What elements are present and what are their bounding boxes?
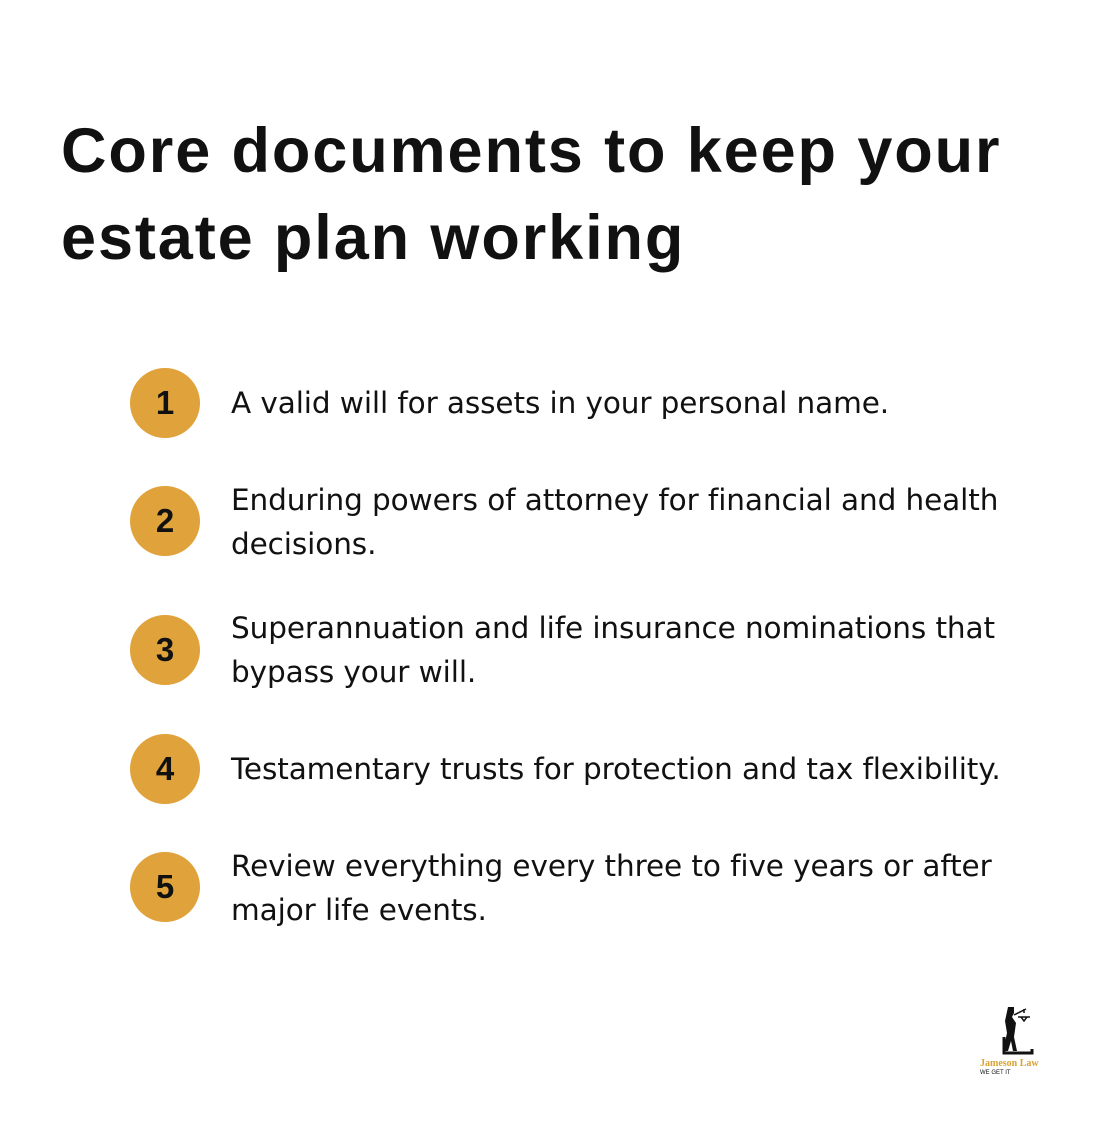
number badge 5 [130,852,200,922]
text 5: Review everything every three to five years or after [231,849,992,883]
logo: Jameson Law [980,1007,1039,1076]
text 4: Testamentary trusts for protection and tax flexibility. [231,752,1001,786]
text 1: A valid will for assets in your personal name. [231,386,889,420]
number badge 4 [130,734,200,804]
text 3 [231,611,995,689]
text 3: Superannuation and life insurance nominations that [231,611,995,645]
number badge 3: 3 [156,631,174,668]
number badge 1 [130,368,200,438]
number badge 2 [130,486,200,556]
number badge 5: 5 [156,868,174,905]
item 2 [130,483,998,561]
item 3 [130,611,995,689]
text 2 [231,483,998,561]
text 5: major life events. [231,893,487,927]
title: estate plan working [61,203,685,273]
text 2: decisions. [231,527,376,561]
text 2: Enduring powers of attorney for financial and health [231,483,998,517]
text 3: bypass your will. [231,655,476,689]
item 5 [130,849,992,927]
item 4 [130,734,1001,804]
number badge 1: 1 [156,384,174,421]
icon: justice figure [1002,1007,1034,1054]
title [61,116,1001,273]
text 5 [231,849,992,927]
title: Core documents to keep your [61,116,1001,186]
logo: Jameson Law: WE GET IT [980,1070,1011,1076]
logo text: Jameson Law [980,1058,1039,1069]
number badge 2: 2 [156,502,174,539]
number badge 4: 4 [156,750,174,787]
item 1 [130,368,889,438]
number badge 3 [130,615,200,685]
